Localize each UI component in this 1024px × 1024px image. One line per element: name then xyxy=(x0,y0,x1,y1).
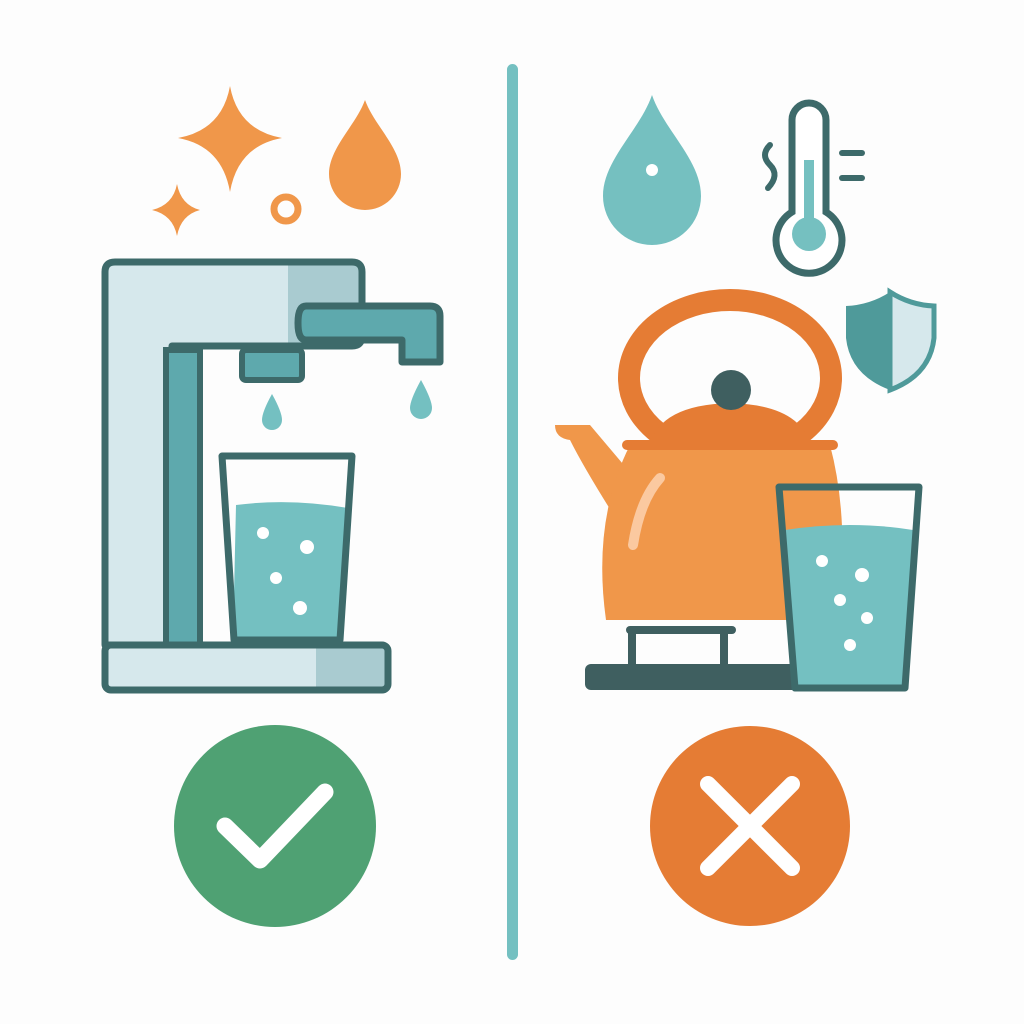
icon: small sparkle xyxy=(152,184,200,236)
icon: orange drop xyxy=(329,100,401,210)
stove xyxy=(628,628,636,668)
glass xyxy=(233,502,348,638)
divider line xyxy=(507,64,518,960)
lid xyxy=(650,403,810,445)
kettle on stove xyxy=(555,300,842,690)
icon: teal drop xyxy=(603,95,701,245)
nozzle xyxy=(242,350,302,380)
right glass xyxy=(779,487,919,688)
drops xyxy=(262,394,282,430)
faucet xyxy=(298,306,440,362)
icon: green check circle xyxy=(174,725,376,927)
spout xyxy=(555,425,628,525)
body xyxy=(602,445,842,620)
icon: ring xyxy=(274,197,298,221)
icon: orange X circle xyxy=(650,726,850,926)
water dispenser xyxy=(105,262,440,690)
icon: thermometer xyxy=(765,103,862,273)
icon: large sparkle xyxy=(178,86,282,192)
handle xyxy=(629,300,831,456)
base xyxy=(105,645,388,690)
icon: shield xyxy=(846,292,934,390)
